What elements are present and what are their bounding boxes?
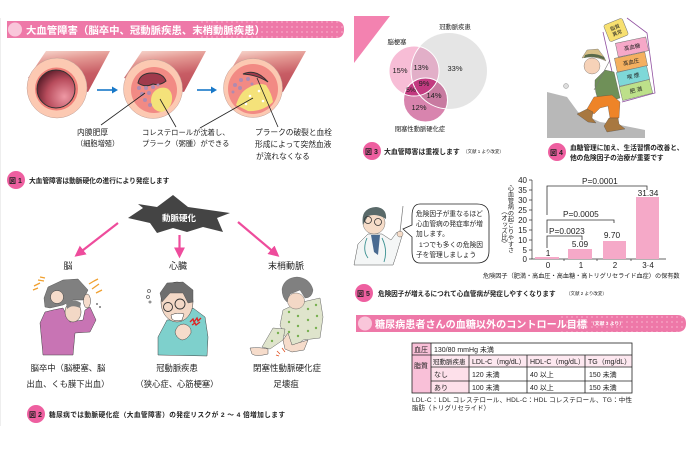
venn diagram: 33% [447,64,463,73]
bar chart: 危険因子（肥満・高血圧・高血糖・高トリグリセライド血症）の保有数 [483,272,680,280]
label: intimal thickening: 内膜肥厚 [77,127,108,137]
label: stroke diagnosis [27,363,109,389]
target table: 40 以上 [530,383,554,392]
bar chart: P=0.0005 [563,209,599,219]
label: brain: 脳 [63,260,73,271]
panel: section 2 header: 糖尿病患者さんの血糖以外のコントロール目標 [375,318,587,331]
bar values: 31.34 [638,188,659,198]
panel: section 1 header [7,21,344,38]
target table: 150 未満 [589,370,617,379]
y ticks: 40 [518,176,528,185]
caption: figure 3: （文献 1 より改変） [463,148,504,155]
label: coronary: 冠動脈疾患 [439,22,471,31]
backpack boxes: 高血糖 [623,41,641,53]
target table: 150 未満 [589,383,617,392]
illustration: doctor [354,206,403,265]
label: peripheral disease: 足壊疽 [273,379,299,389]
label: coronary disease [136,363,218,389]
bars [535,257,559,259]
table footnote [412,395,632,412]
speech bubble [403,204,489,263]
target table: 40 以上 [530,370,554,379]
y ticks: 30 [518,196,528,205]
target table: 脂質 [414,361,428,370]
target table: 血圧 [414,345,428,354]
venn diagram: 5% [406,87,416,94]
y ticks: 25 [518,206,528,215]
illustration: ruptured plaque artery [224,51,306,118]
target table [412,343,632,393]
label: intimal thickening [76,127,119,148]
caption: figure 2: 図 2 [29,411,42,419]
label: stroke diagnosis: 出血、くも膜下出血） [27,379,109,389]
backpack boxes: 異常 [611,28,623,38]
arrow: to heart [178,235,181,254]
illustration: healthy artery [27,51,110,118]
illustration: seated woman with leg pain [250,277,323,356]
y ticks: 35 [518,186,528,195]
y ticks [518,176,528,264]
panel: section 2 header [356,315,686,332]
illustration: man with chest pain [146,282,208,356]
label: coronary disease: 冠動脈疾患 [156,363,198,373]
caption: figure 3: 図 3 [365,148,378,156]
label: PAD: 閉塞性動脈硬化症 [395,124,446,133]
x labels: 2 [613,261,618,270]
label: cerebral infarction: 脳梗塞 [388,37,407,46]
bar chart: P=0.0001 [582,176,618,186]
target table: 120 未満 [472,370,500,379]
x labels: 1 [579,261,584,270]
bar values: 5.09 [572,239,588,249]
axes [529,180,666,261]
label: intimal thickening: （細胞増殖） [76,139,119,148]
caption: figure 5: （文献 2 より改変） [566,290,607,297]
starburst: arteriosclerosis [128,195,230,233]
significance brackets [547,186,647,248]
label: plaque rupture [255,127,332,161]
label: cholesterol plaque: プラーク（粥腫）ができる [142,139,229,148]
bar chart: P=0.0023 [549,226,585,236]
caption: figure 1: 大血管障害は動脈硬化の進行により発症します [29,176,170,185]
decorative pink corner [354,16,390,63]
bar values: 1 [546,248,551,258]
bar chart [483,176,680,280]
label: peripheral disease [253,363,321,389]
venn diagram [389,33,487,122]
illustration: artery with plaque [124,51,206,118]
caption: figure 3 [363,142,504,160]
backpack boxes: 脂質 [609,23,621,33]
y ticks: 5 [523,246,528,255]
page margin rule [0,18,1,426]
speech bubble: 加します。 [416,229,449,238]
panel: section 1 header: 大血管障害（脳卒中、冠動脈疾患、末梢動脈疾患） [26,24,265,37]
target table: 130/80 mmHg 未満 [434,345,494,354]
table footnote: 脂肪（トリグリセライド） [412,403,490,412]
illustration: person with headache [33,277,102,355]
bar chart: （オッズ比） [500,208,508,247]
caption: figure 4 [548,143,683,162]
y ticks: 0 [523,255,528,264]
speech bubble: 子を管理しましょう [416,250,476,259]
caption: figure 1 [7,171,170,189]
table footnote: LDL-C：LDL コレステロール、HDL-C：HDL コレステロール、TG：中性 [412,395,632,404]
label: cholesterol plaque [142,128,230,148]
caption: figure 4: 図 4 [550,149,563,157]
caption: figure 2: 糖尿病では動脈硬化症（大血管障害）の発症リスクが 2 ～ 4 倍増加します [49,410,285,419]
backpack boxes [603,18,653,101]
arrow: to plaque stage [97,86,118,94]
y axis title: 心血管病の起こりやすさ [506,184,514,254]
leader lines [101,78,278,128]
venn diagram: 14% [426,91,442,100]
target table: 冠動脈疾患 [433,357,466,366]
label: coronary disease: （狭心症、心筋梗塞） [136,379,218,389]
bar values: 9.70 [604,230,620,240]
caption: figure 2 [27,405,285,423]
label: stroke diagnosis: 脳卒中（脳梗塞、脳 [31,363,105,373]
starburst: arteriosclerosis: 動脈硬化 [162,213,196,223]
target table: 100 未満 [472,383,500,392]
x labels: 0 [546,261,551,270]
label: heart: 心臓 [169,260,187,271]
bar values [546,188,659,258]
arrow: to rupture stage [197,86,217,94]
backpack boxes: 喫 煙 [626,71,640,81]
y ticks: 15 [518,226,528,235]
panel: section 2 header: （文献 3 より） [590,320,624,327]
arrow: to peripheral artery [238,222,276,254]
x labels: 3·4 [642,261,654,270]
y ticks: 20 [518,216,528,225]
caption: figure 4: 他の危険因子の治療が重要です [570,153,664,162]
target table: なし [434,371,448,379]
speech bubble: 危険因子が重なるほど [416,209,483,218]
caption: figure 5: 図 5 [357,290,370,298]
backpack boxes: 高血圧 [622,56,640,68]
caption: figure 1: 図 1 [9,177,22,185]
label: plaque rupture: 形成によって突然血液 [255,139,332,149]
illustration: hiker carrying risk factors [547,18,655,138]
target table: LDL-C（mg/dL） [472,358,526,366]
x labels [546,261,654,270]
speech bubble: 心血管病の発症率が増 [416,219,483,228]
venn diagram: 13% [413,63,429,72]
speech bubble: 1つでも多くの危険因 [419,240,483,249]
target table: あり [434,384,448,392]
arrow: to brain [78,223,118,254]
label: plaque rupture: が流れなくなる [256,151,310,161]
label: peripheral disease: 閉塞性動脈硬化症 [253,363,321,373]
caption: figure 3: 大血管障害は重複します [384,147,460,156]
label: plaque rupture: プラークの破裂と血栓 [255,127,332,137]
y ticks: 10 [518,236,528,245]
venn diagram: 15% [392,66,408,75]
backpack boxes: 肥 満 [629,85,644,95]
label: cholesterol plaque: コレステロールが沈着し、 [142,128,230,137]
caption: figure 5: 危険因子が増えるにつれて心血管病が発症しやすくなります [378,289,556,298]
caption: figure 5 [355,284,607,302]
label: peripheral artery: 末梢動脈 [268,260,304,271]
target table: HDL-C（mg/dL） [530,358,585,366]
venn diagram: 9% [419,79,430,88]
target table: TG（mg/dL） [588,358,631,366]
venn diagram: 12% [411,103,427,112]
caption: figure 4: 血糖管理に加え、生活習慣の改善と、 [570,143,683,152]
